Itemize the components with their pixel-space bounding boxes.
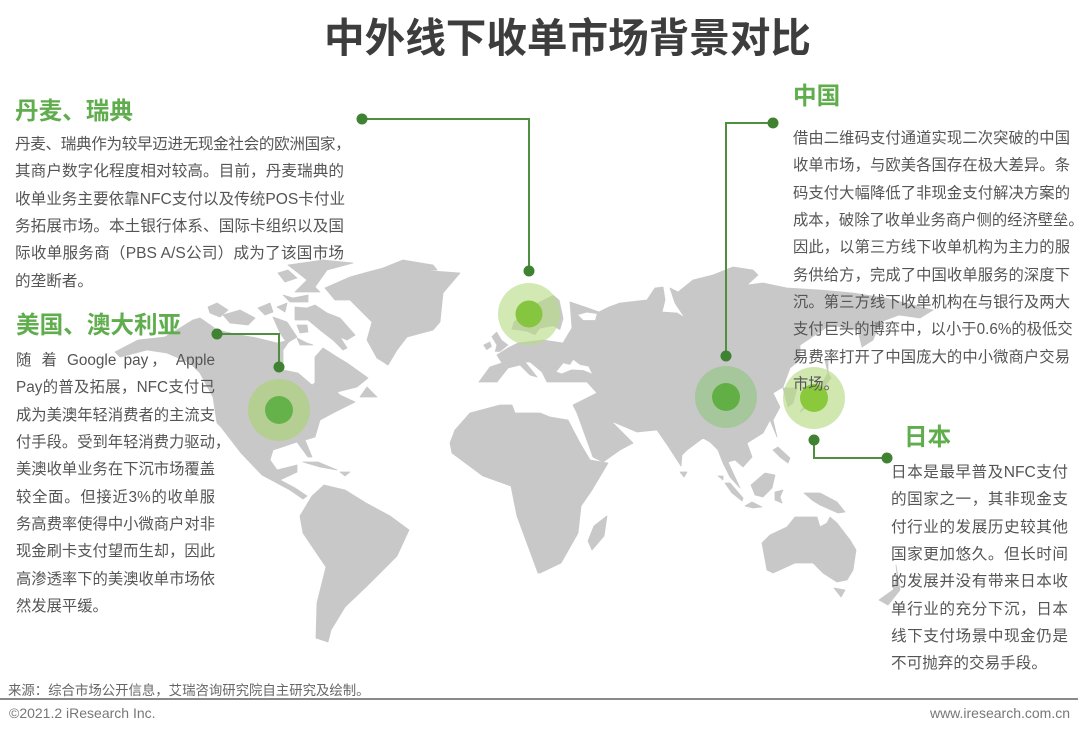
text: Japan: 不可抛弃的交易手段。 [891, 655, 1047, 672]
text: Japan [891, 464, 1068, 672]
marker: China [695, 366, 757, 428]
text: China: 易费率打开了中国庞大的中小微商户交易 [793, 349, 1070, 366]
text: China: 码支付大幅降低了非现金支付解决方案的 [793, 185, 1070, 202]
map: Asia islands [680, 360, 845, 513]
text: Japan: 国家更加悠久。但长时间 [891, 546, 1068, 563]
title: 中外线下收单市场背景对比 [324, 15, 811, 61]
text: China: 成本，破除了收单业务商户侧的经济壁垒。 [793, 212, 1080, 229]
website: www.iresearch.com.cn [930, 705, 1070, 721]
text: China: 务供给方，完成了中国收单服务的深度下 [793, 267, 1070, 284]
source note: 来源：综合市场公开信息，艾瑞咨询研究院自主研究及绘制。 [8, 683, 370, 698]
text: Denmark and Sweden [15, 136, 350, 290]
text: Japan: 的发展并没有带来日本收 [891, 573, 1068, 590]
text: USA and Australia: 务高费率使得中小微商户对非 [16, 516, 215, 533]
map: continents [115, 260, 933, 642]
text: Denmark and Sweden: 丹麦、瑞典作为较早迈进无现金社会的欧洲国家， [15, 136, 350, 153]
text: China: 沉。第三方线下收单机构在与银行及两大 [793, 294, 1070, 311]
text: USA and Australia: 然发展平缓。 [16, 598, 108, 615]
text: Denmark and Sweden: 其商户数字化程度相对较高。目前，丹麦瑞典的 [15, 163, 344, 180]
text: Denmark and Sweden: 务拓展市场。本土银行体系、国际卡组织以及国 [15, 218, 344, 235]
text: Denmark and Sweden: 的垄断者。 [15, 273, 93, 290]
text: Denmark and Sweden: 收单业务主要依靠NFC支付以及传统POS卡付业 [15, 191, 345, 208]
text: China: 市场。 [793, 376, 839, 393]
map: South America [300, 485, 409, 642]
text: USA and Australia: 随 着 Google pay， Apple [16, 352, 215, 369]
text: Japan: 付行业的发展历史较其他 [891, 519, 1068, 536]
text: China: 借由二维码支付通道实现二次突破的中国 [793, 130, 1070, 147]
text: Japan: 日本是最早普及NFC支付 [891, 464, 1068, 481]
text: USA and Australia [16, 352, 230, 615]
heading: USA and Australia: 美国、澳大利亚 [16, 313, 181, 339]
text: China: 收单市场，与欧美各国存在极大差异。条 [793, 157, 1070, 174]
marker: Denmark and Sweden [498, 283, 560, 345]
heading: Denmark and Sweden: 丹麦、瑞典 [15, 99, 133, 125]
map: Eurasia [479, 267, 933, 488]
text: USA and Australia: 高渗透率下的美澳收单市场依 [16, 571, 215, 588]
text: China [793, 130, 1080, 393]
text: USA and Australia: Pay的普及拓展，NFC支付已 [16, 379, 215, 396]
map: North America [115, 260, 377, 499]
map: Scandinavia and Britain [483, 295, 597, 373]
connector: China [720, 118, 778, 362]
marker: Japan [783, 367, 845, 429]
connector: Denmark and Sweden [356, 114, 534, 276]
map: Africa [450, 405, 608, 573]
heading: China: 中国 [793, 84, 840, 110]
heading: Japan: 日本 [904, 425, 951, 451]
text: Japan: 的国家之一，其非现金支 [891, 491, 1068, 508]
connector: Japan [808, 434, 892, 464]
text: Denmark and Sweden: 际收单服务商（PBS A/S公司）成为了该国市场 [15, 245, 344, 262]
connector: USA and Australia [212, 328, 284, 372]
text: USA and Australia: 美澳收单业务在下沉市场覆盖 [16, 461, 215, 478]
text: China: 因此，以第三方线下收单机构为主力的服 [793, 239, 1070, 256]
text: USA and Australia: 成为美澳年轻消费者的主流支 [16, 407, 215, 424]
text: USA and Australia: 现金刷卡支付望而生却，因此 [16, 543, 215, 560]
map: Australia and New Zealand [762, 517, 900, 605]
map: Madagascar [588, 516, 607, 550]
copyright: ©2021.2 iResearch Inc. [9, 705, 156, 721]
marker: USA and Australia [248, 379, 310, 441]
text: Japan: 单行业的充分下沉，日本 [891, 601, 1068, 618]
text: USA and Australia: 较全面。但接近3%的收单服 [16, 489, 215, 506]
text: Japan: 线下支付场景中现金仍是 [891, 628, 1068, 645]
text: USA and Australia: 付手段。受到年轻消费力驱动， [16, 434, 230, 451]
text: China: 支付巨头的博弈中，以小于0.6%的极低交 [793, 321, 1073, 338]
map: Greenland [325, 260, 460, 365]
